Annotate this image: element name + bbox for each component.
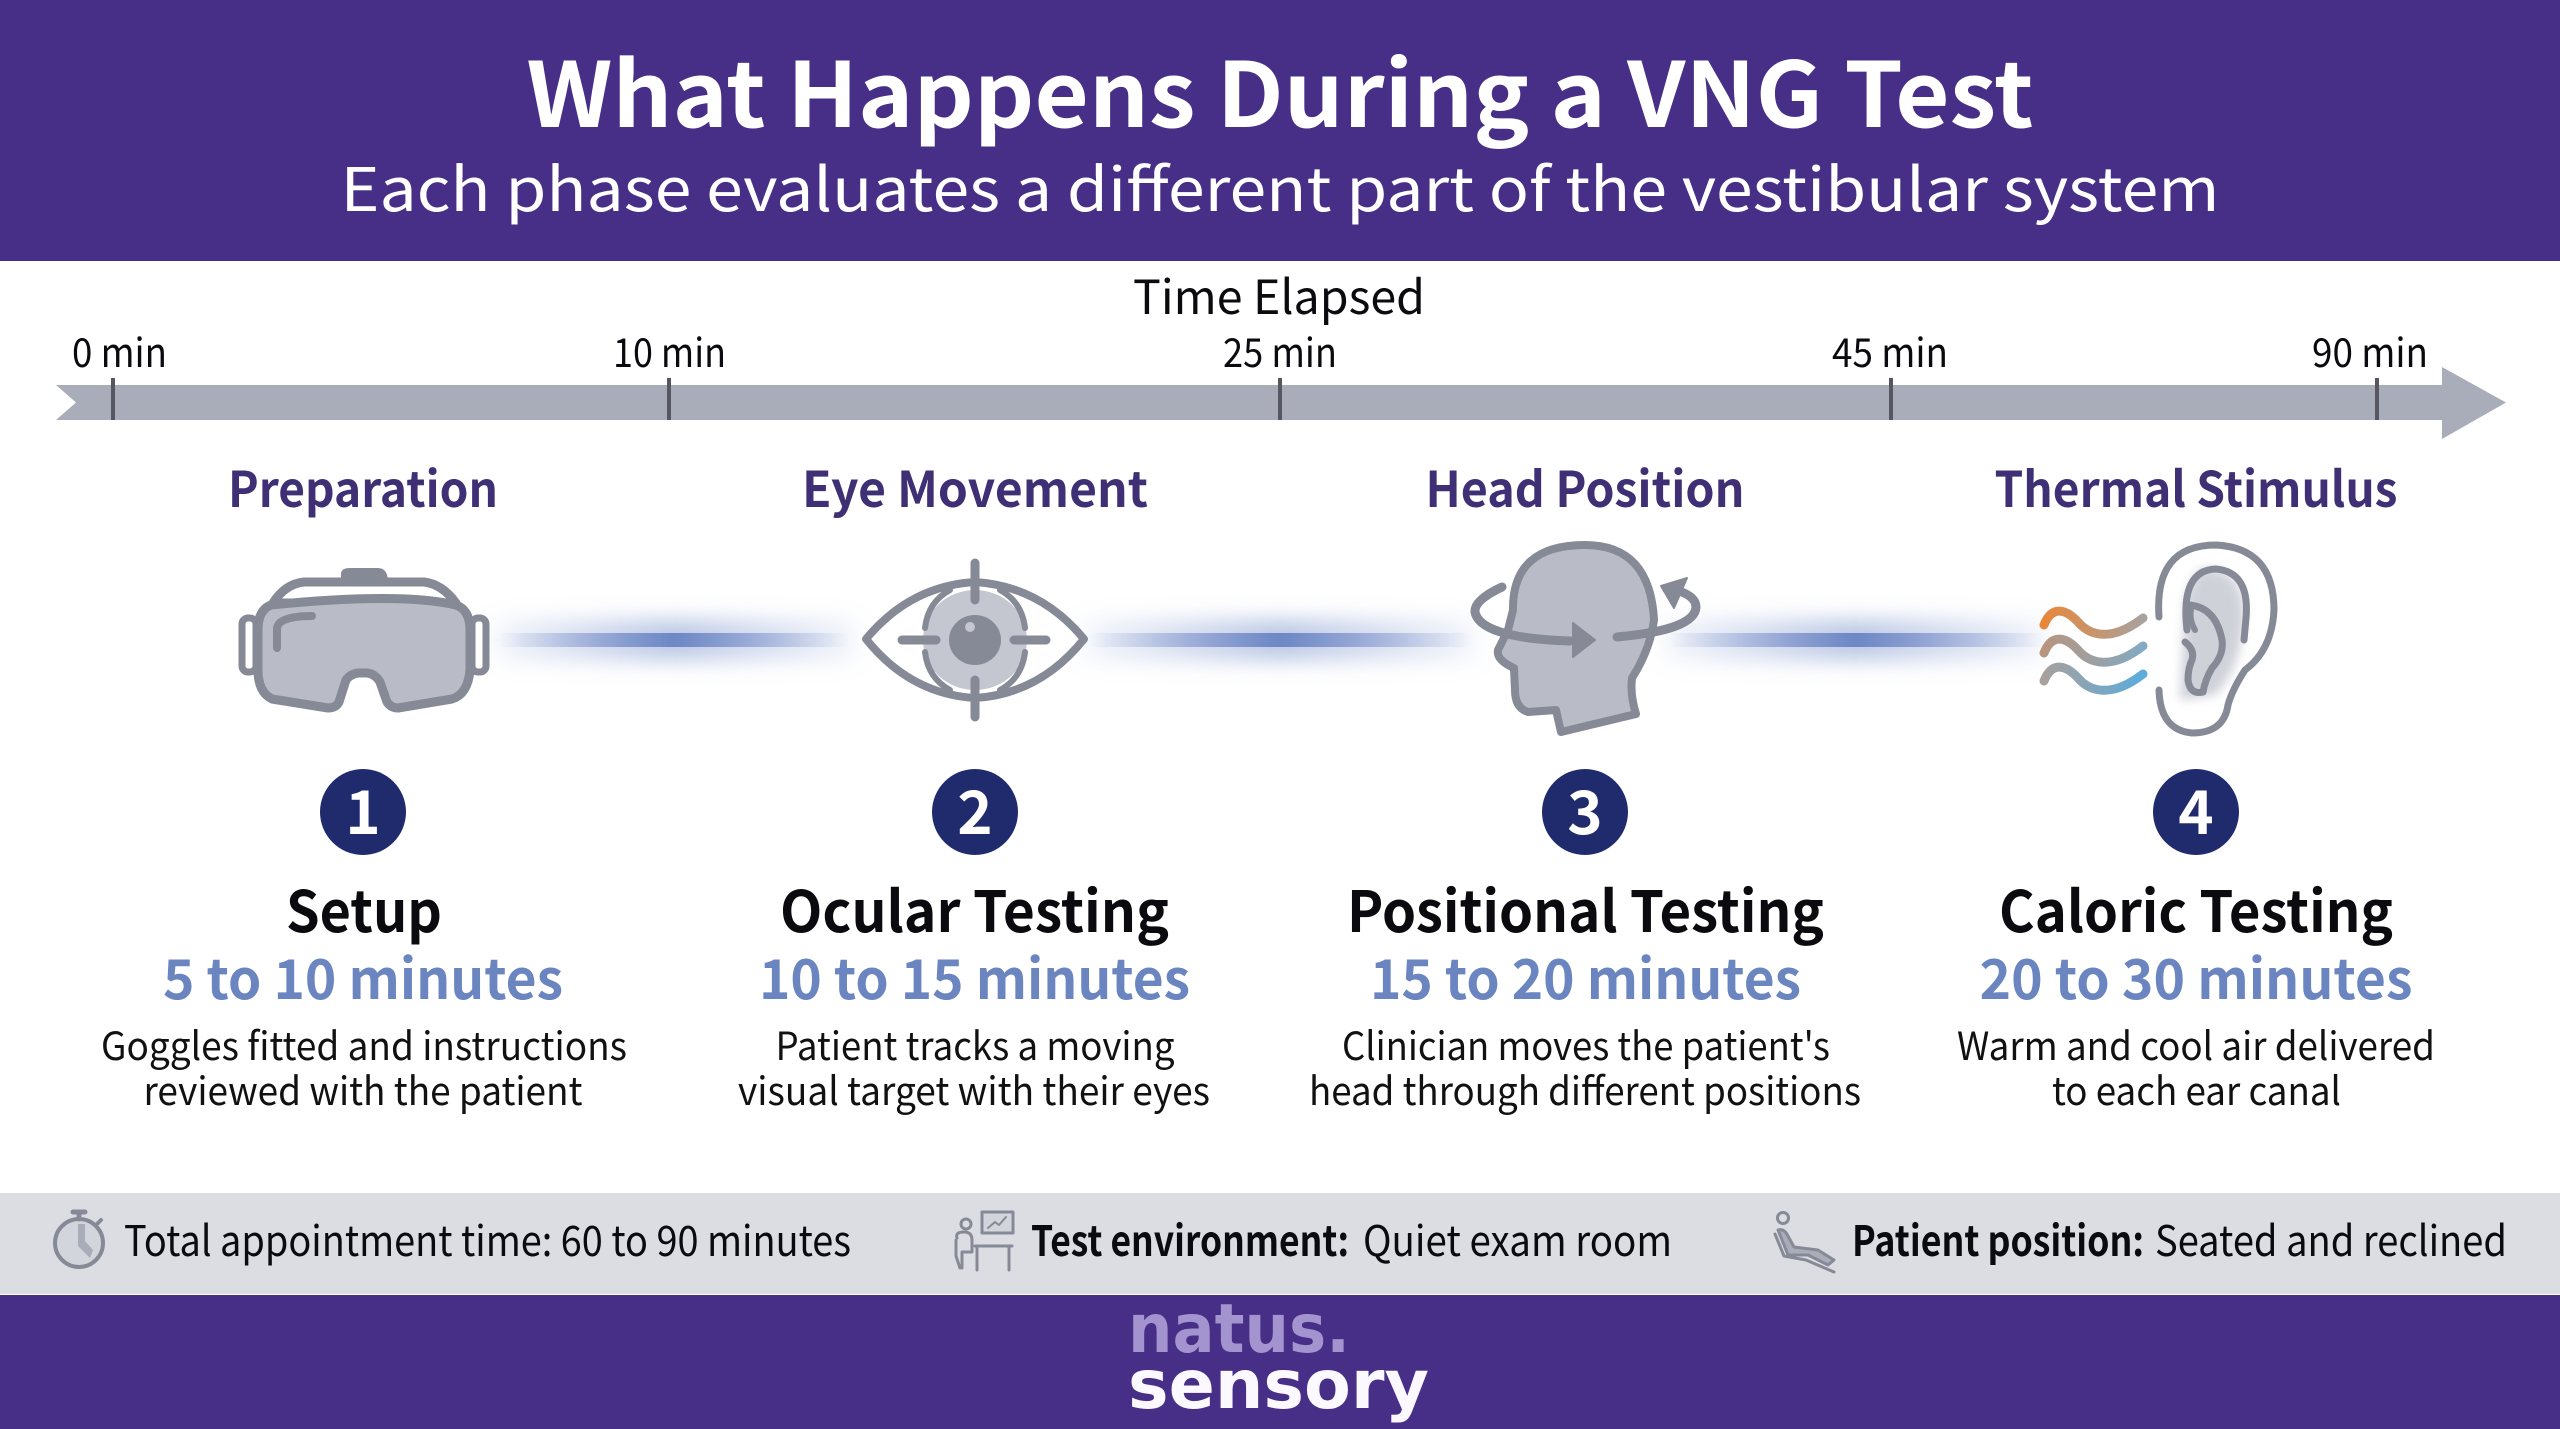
description: to each ear canal bbox=[2052, 1061, 2341, 1117]
icon: eye target bbox=[866, 563, 1084, 717]
step 1 bbox=[101, 765, 627, 1117]
phase label: Thermal Stimulus: Thermal Stimulus bbox=[1994, 451, 2398, 522]
icon: stopwatch bbox=[55, 1212, 103, 1267]
timeline heading: Time Elapsed bbox=[1133, 259, 1425, 328]
strip text: environment: Test environment: bbox=[1031, 1208, 1349, 1269]
title: What Happens During a VNG Test bbox=[526, 23, 2034, 153]
duration: 20 to 30 minutes bbox=[1980, 935, 2412, 1015]
strip text: total time: Total appointment time: 60 to 90 minutes bbox=[124, 1208, 851, 1269]
phase label: Eye Movement: Eye Movement bbox=[802, 451, 1148, 522]
footer band bbox=[0, 1295, 2560, 1429]
badge digit 3: 3 bbox=[1567, 765, 1603, 852]
duration: 15 to 20 minutes bbox=[1370, 935, 1801, 1015]
badge digit 2: 2 bbox=[957, 765, 993, 852]
timeline arrow bbox=[56, 321, 2506, 439]
tick label 0 min: 0 min bbox=[72, 321, 167, 379]
logo: natus: natus. bbox=[1128, 1290, 1350, 1369]
strip text: position: Seated and reclined bbox=[2155, 1208, 2507, 1269]
tick label 90 min: 90 min bbox=[2312, 321, 2428, 379]
phase label: Head Position: Head Position bbox=[1426, 451, 1744, 522]
connector 3 bbox=[1665, 619, 2045, 661]
step title: Ocular Testing bbox=[780, 867, 1169, 949]
icon: goggles bbox=[242, 570, 486, 708]
duration: 10 to 15 minutes bbox=[759, 935, 1190, 1015]
description: Goggles fitted and instructions bbox=[101, 1016, 627, 1072]
tick label 45 min: 45 min bbox=[1832, 321, 1948, 379]
number badge 2 bbox=[932, 769, 1018, 855]
badge digit 1: 1 bbox=[345, 765, 381, 852]
logo: sensory: sensory bbox=[1128, 1346, 1429, 1425]
connector 1 bbox=[495, 619, 855, 661]
description: Warm and cool air delivered bbox=[1957, 1016, 2435, 1072]
subtitle: Each phase evaluates a different part of the vestibular system bbox=[340, 142, 2220, 229]
number badge 3 bbox=[1542, 769, 1628, 855]
step 3 bbox=[1309, 765, 1861, 1117]
connector 2 bbox=[1085, 619, 1475, 661]
strip text: position: Patient position: bbox=[1852, 1208, 2144, 1269]
number badge 4 bbox=[2153, 769, 2239, 855]
number badge 1 bbox=[320, 769, 406, 855]
duration: 5 to 10 minutes bbox=[163, 935, 563, 1015]
icon: reclined patient bbox=[1775, 1212, 1834, 1272]
step title: Caloric Testing bbox=[1999, 867, 2393, 949]
strip text: environment: Quiet exam room bbox=[1363, 1208, 1672, 1269]
badge digit 4: 4 bbox=[2178, 765, 2214, 852]
step 4 bbox=[1957, 765, 2435, 1117]
description: reviewed with the patient bbox=[144, 1061, 583, 1117]
step title: Setup bbox=[286, 867, 442, 949]
header band bbox=[0, 0, 2560, 261]
phase label: Preparation: Preparation bbox=[228, 451, 498, 522]
description: Clinician moves the patient's bbox=[1342, 1016, 1830, 1072]
icon: head with rotation arrows bbox=[1475, 545, 1696, 732]
icon: desk with chart bbox=[956, 1212, 1013, 1270]
tick label 10 min: 10 min bbox=[613, 321, 726, 379]
description: Patient tracks a moving bbox=[776, 1016, 1174, 1072]
description: head through different positions bbox=[1309, 1061, 1861, 1117]
info strip bbox=[0, 1193, 2560, 1294]
icon: ear with air waves bbox=[2044, 545, 2274, 733]
step 2 bbox=[738, 765, 1210, 1117]
tick label 25 min: 25 min bbox=[1223, 321, 1337, 379]
step title: Positional Testing bbox=[1347, 867, 1824, 949]
description: visual target with their eyes bbox=[738, 1061, 1210, 1117]
